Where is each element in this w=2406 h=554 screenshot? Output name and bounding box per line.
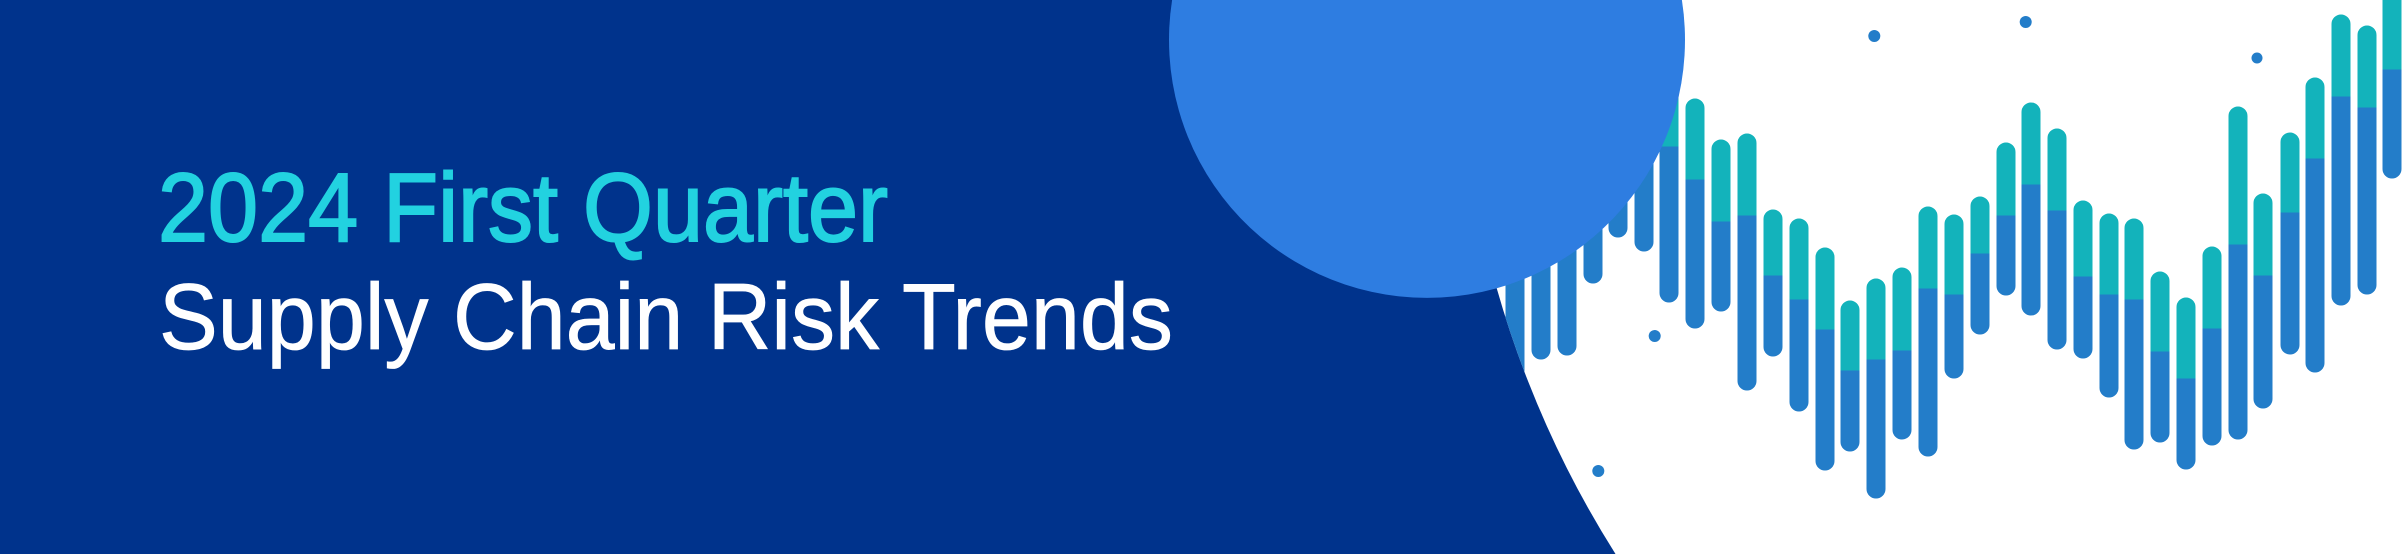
- teal upper bar segments: [1660, 0, 2401, 378]
- scattered dots: [1592, 16, 2262, 477]
- blue lower bar segments: [1506, 69, 2401, 498]
- bar chart: [1506, 0, 2401, 498]
- white circular panel: [1458, 0, 2406, 554]
- large blue circle: [1169, 0, 1685, 298]
- title line 2: Supply Chain Risk Trends: [159, 264, 1173, 369]
- title line 1: 2024 First Quarter: [158, 153, 888, 262]
